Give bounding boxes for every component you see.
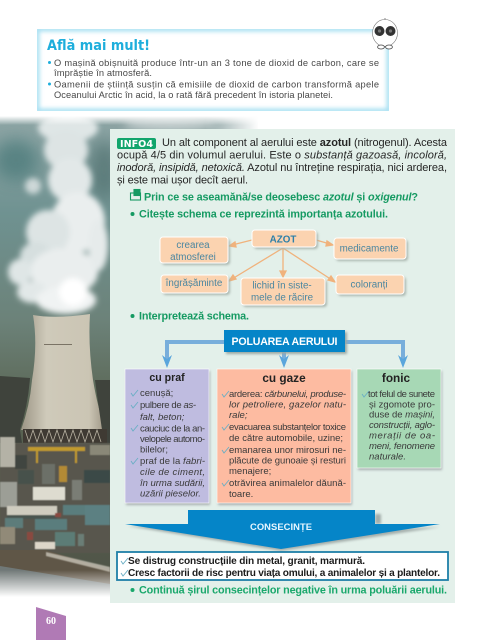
heading: POLUAREA AERULUI bbox=[224, 330, 347, 354]
panel: fonic bbox=[357, 369, 442, 470]
node: crearea atmosferei: atmosferei bbox=[170, 252, 216, 263]
heading: POLUAREA AERULUI: POLUAREA AERULUI bbox=[232, 336, 338, 348]
panel: cu gaze: otrăvirea animalelor dăună- bbox=[229, 478, 346, 489]
panel: cu gaze: arderea: cărbunelui, produse- bbox=[229, 389, 346, 400]
panel: cu praf: cenușă; bbox=[140, 388, 173, 399]
panel: cu praf: pulbere de as- bbox=[140, 400, 196, 411]
node: lichid în sistemele de răcire: mele de răcire bbox=[251, 292, 314, 304]
panel: cu praf: în urma sudării, bbox=[140, 478, 205, 489]
connectors: poluarea branches bbox=[162, 340, 408, 368]
task: citește schema: Citește schema ce reprezintă importanța azotului. bbox=[139, 208, 388, 220]
text block: facts: împrăștie în atmosferă. bbox=[53, 68, 152, 78]
node: îngrășăminte: îngrășăminte bbox=[165, 278, 223, 289]
panel: fonic: construcții, aglo- bbox=[369, 420, 435, 431]
panel: fonic: meni, fenomene bbox=[369, 441, 435, 452]
panel: INFO 4 main green panel bbox=[110, 129, 455, 603]
panel: fonic: merații de oa- bbox=[369, 430, 435, 442]
industrial buildings bbox=[0, 437, 110, 553]
panel: fonic: tot felul de sunete bbox=[368, 389, 435, 400]
text block: facts: O mașină obișnuită produce într-un an 3 tone de dioxid de carbon, care se bbox=[54, 58, 379, 68]
text block: facts: Oamenii de știință susțin că emisiile de dioxid de carbon transformă apele bbox=[54, 80, 379, 90]
panel: cu praf: cile de ciment, bbox=[140, 467, 205, 478]
panel: cu praf: bilelor; bbox=[140, 444, 168, 456]
panel: cu gaze: rale; bbox=[229, 410, 248, 421]
node: coloranți bbox=[336, 275, 404, 294]
panel: Află mai mult bbox=[37, 29, 389, 111]
panel: cu gaze: lor petroliere, gazelor natu- bbox=[229, 400, 346, 410]
panel: cu gaze: evacuarea substanțelor toxice bbox=[229, 422, 346, 433]
diagram: AZOT schema bbox=[160, 230, 408, 307]
panel: cu praf: cauciuc de la an- bbox=[140, 424, 205, 434]
tower lattice bbox=[23, 429, 107, 443]
page number tab bbox=[36, 607, 66, 640]
heading: Află mai mult: Află mai mult! bbox=[47, 38, 150, 54]
panel: cu gaze: emanarea unor mirosuri ne- bbox=[229, 445, 346, 456]
node: coloranți: coloranți bbox=[350, 280, 388, 290]
panel: fonic: duse de mașini, bbox=[369, 410, 435, 420]
question: azot vs oxigen: Prin ce se aseamănă/se deosebesc azotul și oxigenul? bbox=[144, 192, 418, 204]
text block: azotul paragraph: și este mai ușor decît aerul. bbox=[117, 174, 248, 186]
node: îngrășăminte bbox=[161, 275, 228, 293]
panel: consequences list: Cresc factorii de risc pentru viața omului, a animalelor și a plantelor. bbox=[128, 568, 440, 579]
panel: cu praf: falt, beton; bbox=[140, 412, 185, 423]
task: continuă șirul: Continuă șirul consecințelor negative în urma poluării aerului. bbox=[139, 584, 447, 596]
panel: cu gaze: menajere; bbox=[229, 466, 271, 477]
icon: owl mascot bbox=[372, 18, 398, 49]
arrow: CONSECINȚE bbox=[125, 510, 440, 551]
text block: azotul paragraph bbox=[117, 137, 448, 186]
panel: cu praf: uzării pieselor. bbox=[140, 488, 201, 500]
node: crearea atmosferei: crearea bbox=[176, 240, 210, 251]
panel: cu praf: cu praf bbox=[149, 372, 185, 384]
icon: question book bbox=[130, 190, 140, 200]
node: crearea atmosferei bbox=[160, 237, 228, 263]
panel: consequences list bbox=[117, 552, 448, 580]
arrow: CONSECINȚE: CONSECINȚE bbox=[250, 521, 312, 532]
text block: facts: Oceanului Arctic în acid, la o rată fără precedent în istoria planetei. bbox=[54, 90, 333, 100]
node shadows bbox=[162, 232, 408, 307]
panel: cu gaze bbox=[217, 369, 352, 505]
node: medicamente: medicamente bbox=[340, 244, 399, 254]
node: lichid în sistemele de răcire: lichid în siste- bbox=[252, 280, 312, 292]
node: AZOT bbox=[252, 230, 316, 247]
panel: cu praf: praf de la fabri- bbox=[140, 456, 205, 467]
panel: cu gaze: de către automobile, uzine; bbox=[229, 433, 343, 444]
panel: fonic: și zgomote pro- bbox=[369, 400, 435, 410]
text block: facts bbox=[48, 58, 379, 100]
smoke plume bbox=[8, 114, 108, 314]
arrows: AZOT links bbox=[229, 240, 335, 282]
page number tab: 60 bbox=[46, 616, 56, 627]
text block: azotul paragraph: inodoră, insipidă, netoxică. Azotul nu întreține respirația, nici arderea, bbox=[117, 162, 447, 174]
panel: fonic: fonic bbox=[382, 371, 411, 385]
panel: fonic: naturale. bbox=[369, 452, 406, 462]
panel: consequences list: Se distrug construcțiile din metal, granit, marmură. bbox=[128, 556, 365, 567]
panel: cu gaze: plăcute de gunoaie și resturi bbox=[229, 456, 346, 466]
node: lichid în sistemele de răcire bbox=[241, 278, 325, 305]
panel: cu gaze: cu gaze bbox=[262, 371, 306, 385]
node: AZOT: AZOT bbox=[270, 234, 296, 246]
photo: cooling tower with smoke bbox=[0, 114, 259, 604]
panel: cu gaze: toare. bbox=[229, 489, 253, 500]
node: medicamente bbox=[334, 238, 406, 259]
text block: azotul paragraph: ocupă 4/5 din volumul aerului. Este o substanță gazoasă, incoloră, bbox=[117, 150, 447, 162]
tower body bbox=[21, 314, 106, 430]
panel: cu praf bbox=[125, 369, 210, 505]
text block: azotul paragraph: Un alt component al aerului este azotul (nitrogenul). Acesta bbox=[162, 137, 448, 149]
panel: cu praf: velopele automo- bbox=[140, 434, 205, 445]
task: interpretează schema: Interpretează schema. bbox=[139, 310, 249, 322]
badge: INFO 4: INFO4 bbox=[120, 139, 153, 150]
dark ground beside tower bbox=[0, 376, 30, 443]
